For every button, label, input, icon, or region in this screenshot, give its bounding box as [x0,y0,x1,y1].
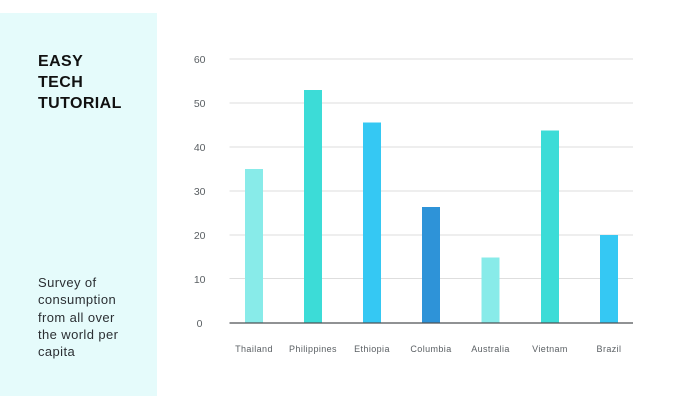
text block: description: capita [38,344,75,359]
y axis labels: 0 [197,318,203,330]
x axis labels: Australia [471,344,510,354]
title: TECH [38,74,83,91]
title: EASY [38,53,83,70]
x axis labels [235,344,621,354]
x axis labels: Ethiopia [354,344,390,354]
text block: description: Survey of [38,275,97,290]
title: TUTORIAL [38,95,122,112]
title [38,53,122,112]
panel: sidebar [0,13,157,396]
y axis labels [194,54,206,330]
x axis labels: Thailand [235,344,273,354]
text block: description [38,275,118,359]
x axis labels: Brazil [597,344,621,354]
text block: description: from all over [38,310,115,324]
y axis labels: 60 [194,54,206,66]
x axis line [230,322,633,324]
y axis labels: 40 [194,142,206,154]
y axis labels: 10 [194,274,206,286]
x axis labels: Vietnam [532,344,568,354]
y axis labels: 20 [194,230,206,242]
x axis labels: Philippines [289,344,337,354]
text block: description: the world per [38,327,118,342]
y axis labels: 30 [194,186,206,198]
x axis labels: Columbia [410,344,452,354]
y axis labels: 50 [194,98,206,110]
text block: description: consumption [38,292,116,307]
bars [245,90,618,323]
